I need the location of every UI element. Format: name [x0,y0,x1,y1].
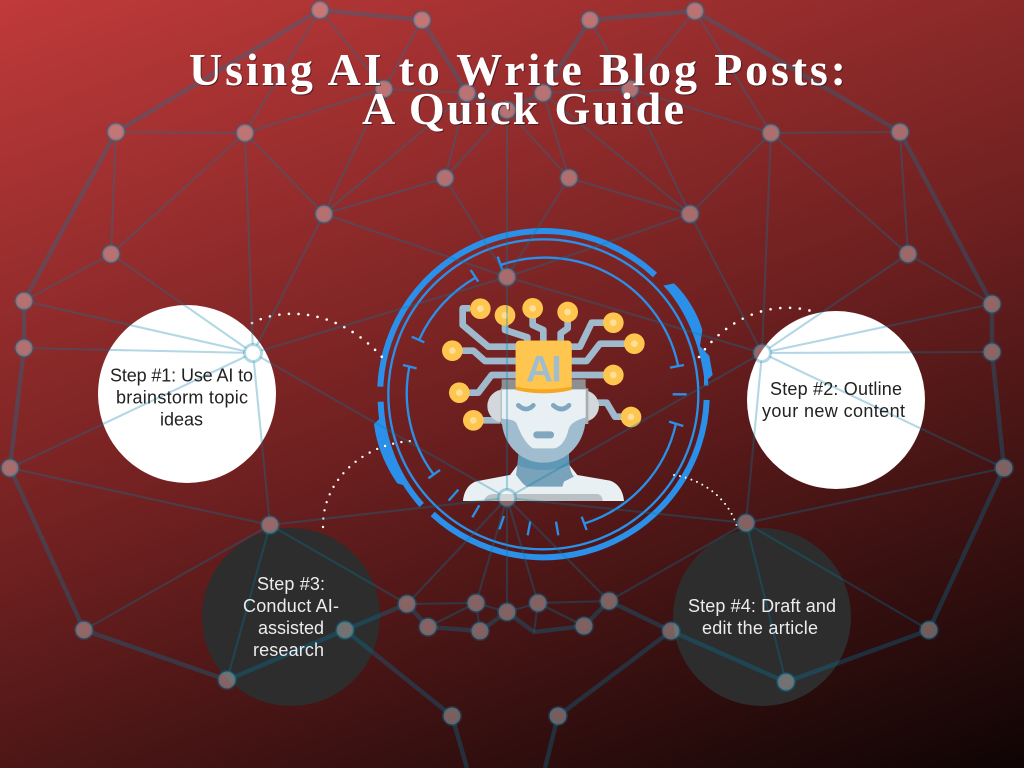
text: step 3: research [253,640,324,660]
circle: step 4 [673,528,851,706]
circuit wires [452,308,634,420]
shoulders [463,462,624,501]
dotted connector: step 4 [674,475,738,530]
eyes and mouth [518,405,569,409]
text: step 2: Step #2: Outline [770,379,902,399]
text: step 4: Step #4: Draft and [688,596,836,616]
dotted connector: step 1 [252,314,388,364]
gold nodes [442,298,645,431]
text: step 1: brainstorm topic [116,388,248,408]
text: step 3: Conduct AI- [243,596,339,616]
AI chip [516,341,572,393]
title [189,44,846,134]
circle: step 1 [98,305,276,483]
AI chip label: AI [526,348,562,390]
dotted connector: step 3 [323,441,414,527]
ears [487,389,521,423]
text: step 4: edit the article [702,618,818,638]
text: step 3: Step #3: [257,574,325,594]
head [502,387,586,463]
circle: step 3 [202,528,380,706]
text: step 3: assisted [258,618,324,638]
text: step 2: your new content [762,401,905,421]
HUD lumps [374,283,713,486]
icon: AI robot head in HUD rings [374,231,713,557]
circle: step 2 [747,311,925,489]
text: step 1: ideas [160,410,203,430]
title: Using AI to Write Blog Posts: [189,44,846,95]
HUD rings [380,231,707,557]
text: step 2 [762,379,905,421]
text: step 3 [243,574,339,660]
title: A Quick Guide [362,83,684,134]
neck [516,457,574,487]
text: step 1 [110,366,253,430]
text: step 1: Step #1: Use AI to [110,366,253,386]
text: step 4 [688,596,836,638]
dotted connector: step 2 [699,308,815,357]
